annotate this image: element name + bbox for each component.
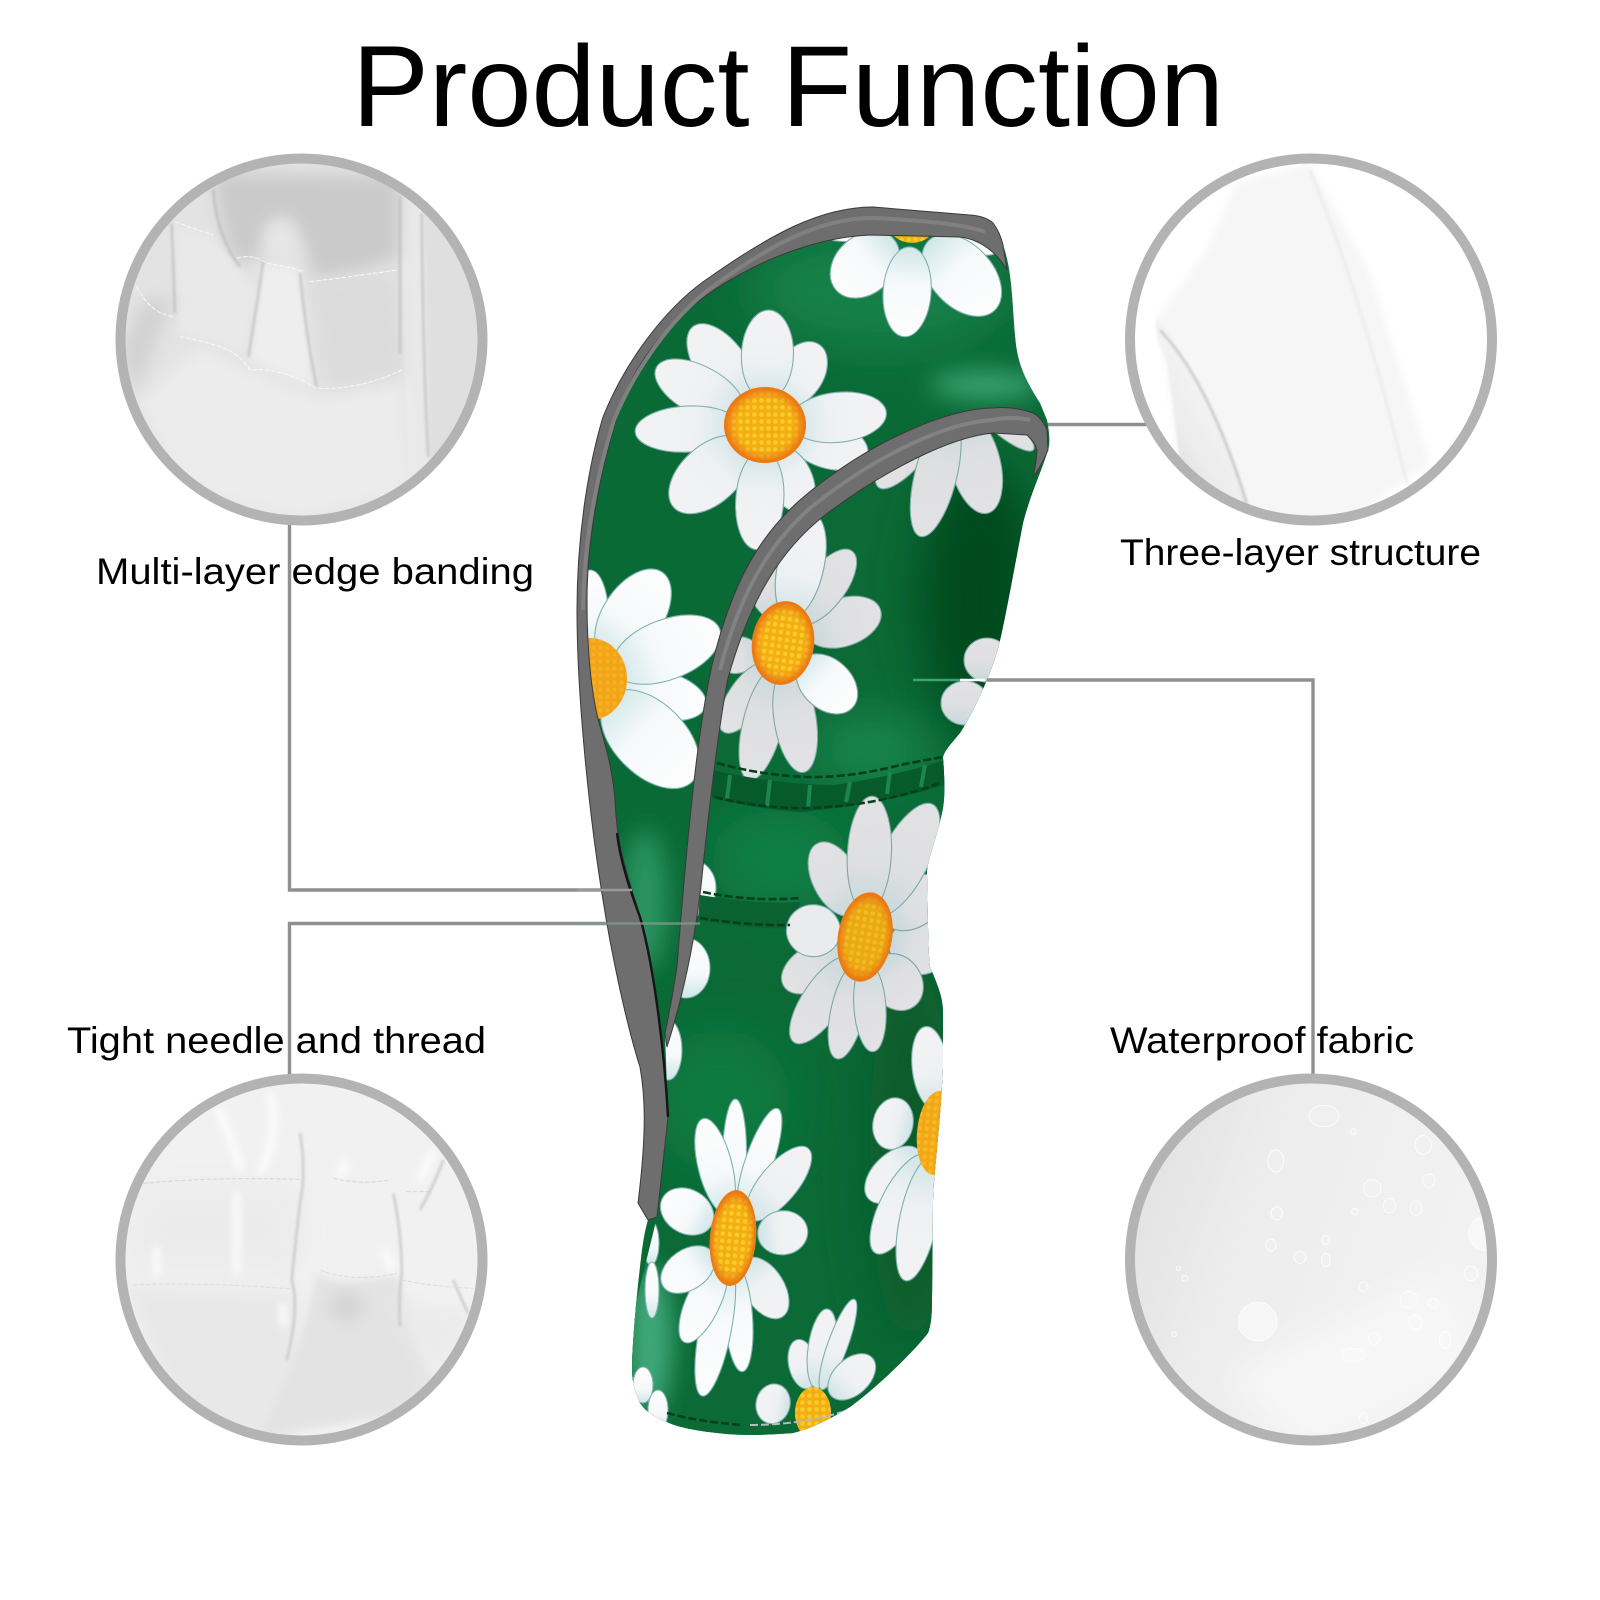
daisy: small bottom-right petal xyxy=(889,1356,921,1394)
daisy: under top flap xyxy=(874,434,1035,538)
daisy: partial petals beside seam xyxy=(665,863,717,1080)
ring xyxy=(1130,1078,1492,1440)
panel: three-layer structure detail circle xyxy=(1125,154,1497,526)
daisy: top xyxy=(830,236,1002,338)
flower disk xyxy=(710,1190,756,1286)
front panel fabric xyxy=(632,446,1048,1435)
product: daisy golf headcover xyxy=(576,206,1050,1435)
panel: needle and thread detail circle xyxy=(116,1074,488,1446)
ring xyxy=(1130,158,1492,520)
daisy: bottom xyxy=(755,1298,876,1431)
flower disk xyxy=(894,236,930,243)
pleat shading between seams xyxy=(698,760,945,928)
label: three-layer structure: Three-layer structure xyxy=(1120,532,1481,573)
label: multi-layer edge banding: Multi-layer edge banding xyxy=(96,551,534,592)
daisy: right lower partial xyxy=(864,1026,943,1282)
stitching: lower seam xyxy=(700,892,800,925)
ring xyxy=(120,158,482,520)
daisy: centre xyxy=(720,519,882,778)
daisy: waist xyxy=(780,796,940,1060)
connector line: waterproof fabric xyxy=(985,680,1313,1074)
back panel fabric xyxy=(588,236,1050,1435)
stitching: upper seam xyxy=(715,757,943,808)
gray binding: outer edge xyxy=(577,207,1007,1220)
flower disk xyxy=(724,387,806,463)
daisy: large upper xyxy=(634,309,889,551)
daisy: lower xyxy=(660,1098,812,1397)
daisy: right edge partial xyxy=(940,638,1000,726)
flower disk xyxy=(752,601,814,685)
flower disk xyxy=(588,638,627,719)
connector line: three-layer structure xyxy=(1046,423,1150,426)
connector overlay on product xyxy=(577,680,985,924)
connector line: multi-layer edge banding xyxy=(290,525,610,890)
daisy: bottom-left partial petals xyxy=(633,1221,668,1430)
binding highlights and inner shadow xyxy=(583,218,1030,1117)
connector line: tight needle and thread xyxy=(290,924,610,1074)
flower disk xyxy=(795,1387,831,1431)
title: Product Function xyxy=(352,23,1224,151)
flower disk xyxy=(837,892,893,982)
flower disk xyxy=(916,1091,942,1175)
gray binding: front flap edge xyxy=(665,408,1048,1047)
ring xyxy=(120,1078,482,1440)
label: waterproof fabric: Waterproof fabric xyxy=(1110,1020,1414,1061)
panel: edge banding detail circle xyxy=(116,154,488,526)
daisy: left, cut by seam xyxy=(588,568,721,790)
stitching: bottom hem xyxy=(667,1413,743,1425)
panel: waterproof fabric detail circle xyxy=(1125,1074,1497,1446)
label: tight needle and thread: Tight needle and thread xyxy=(67,1020,486,1061)
front panel xyxy=(632,434,1048,1435)
